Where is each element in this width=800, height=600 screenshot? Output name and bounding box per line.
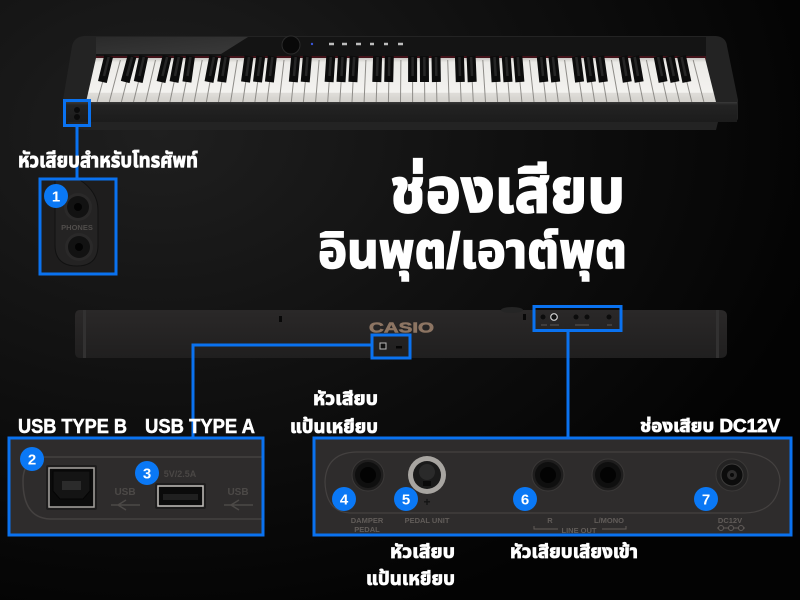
port captions: LINE OUT xyxy=(562,526,597,535)
phone jack lower xyxy=(65,233,93,261)
USB B port xyxy=(46,465,97,510)
badge 2: 2 xyxy=(28,452,36,468)
badge 7: 7 xyxy=(702,492,710,508)
port captions xyxy=(351,495,745,535)
badge 4 xyxy=(332,487,356,511)
badge 4: 4 xyxy=(340,492,349,508)
highlight box: rear jacks xyxy=(534,306,621,330)
label: USB type B: USB TYPE B xyxy=(18,416,127,438)
label: damper pedal jack: แป้นเหยียบ xyxy=(290,416,378,438)
control knob xyxy=(282,36,300,54)
panel: rear jacks xyxy=(314,438,791,535)
heading: connector title: อินพุต/เอาต์พุต xyxy=(318,223,627,281)
label: pedal unit: แป้นเหยียบ xyxy=(366,568,455,590)
port captions: L/MONO xyxy=(594,516,624,525)
piano front view xyxy=(63,36,738,130)
pedal unit socket xyxy=(408,456,446,494)
USB A rating: 5V/2.5A xyxy=(164,469,197,479)
connector lines xyxy=(77,126,568,438)
label: damper pedal jack xyxy=(290,389,378,438)
badge 1: 1 xyxy=(52,188,60,206)
USB A port xyxy=(155,483,206,509)
phones caption: PHONES xyxy=(61,223,93,232)
USB caption left: USB xyxy=(114,487,136,498)
piano rear view xyxy=(75,307,727,358)
badge 3 xyxy=(135,461,159,485)
label: USB type A: USB TYPE A xyxy=(145,416,255,438)
badge 3: 3 xyxy=(143,466,151,482)
line out L jack xyxy=(592,459,624,491)
port captions: DC12V xyxy=(718,516,742,525)
piano black keys xyxy=(102,56,687,82)
line out R jack xyxy=(532,459,564,491)
port captions: + xyxy=(423,495,431,509)
panel buttons xyxy=(329,43,403,45)
USB caption right xyxy=(224,487,253,510)
label: phones: หัวเสียบสำหรับโทรศัพท์ xyxy=(18,150,198,172)
badge 5 xyxy=(394,487,418,511)
badge 6: 6 xyxy=(521,492,529,508)
highlight box: phones on piano xyxy=(64,100,90,126)
casio logo: CASIO xyxy=(369,320,434,336)
badge 5: 5 xyxy=(402,492,410,508)
DC12V socket xyxy=(716,459,748,491)
label: pedal unit: หัวเสียบ xyxy=(390,542,455,563)
badge 7 xyxy=(694,487,718,511)
badge 6 xyxy=(513,487,537,511)
piano white keys xyxy=(86,58,716,102)
panel: USB ports xyxy=(9,438,263,535)
heading: connector title xyxy=(318,157,627,281)
USB caption left xyxy=(111,487,140,510)
phone jack upper xyxy=(64,193,92,221)
port captions: DAMPER xyxy=(351,516,384,525)
USB caption right: USB xyxy=(227,487,249,498)
port captions: PEDAL xyxy=(354,525,380,534)
label: line input: หัวเสียบเสียงเข้า xyxy=(510,541,638,563)
badge 2 xyxy=(20,447,44,471)
label: DC12V: ช่องเสียบ DC12V xyxy=(640,416,780,436)
damper jack xyxy=(352,459,384,491)
label: pedal unit xyxy=(366,542,455,590)
rear ports xyxy=(380,314,612,349)
panel: phones jacks xyxy=(40,179,116,274)
heading: connector title: ช่องเสียบ xyxy=(390,157,625,226)
highlight box: rear USB xyxy=(372,335,410,358)
port captions: PEDAL UNIT xyxy=(405,516,450,525)
label: damper pedal jack: หัวเสียบ xyxy=(313,389,378,410)
port captions: R xyxy=(547,516,553,525)
